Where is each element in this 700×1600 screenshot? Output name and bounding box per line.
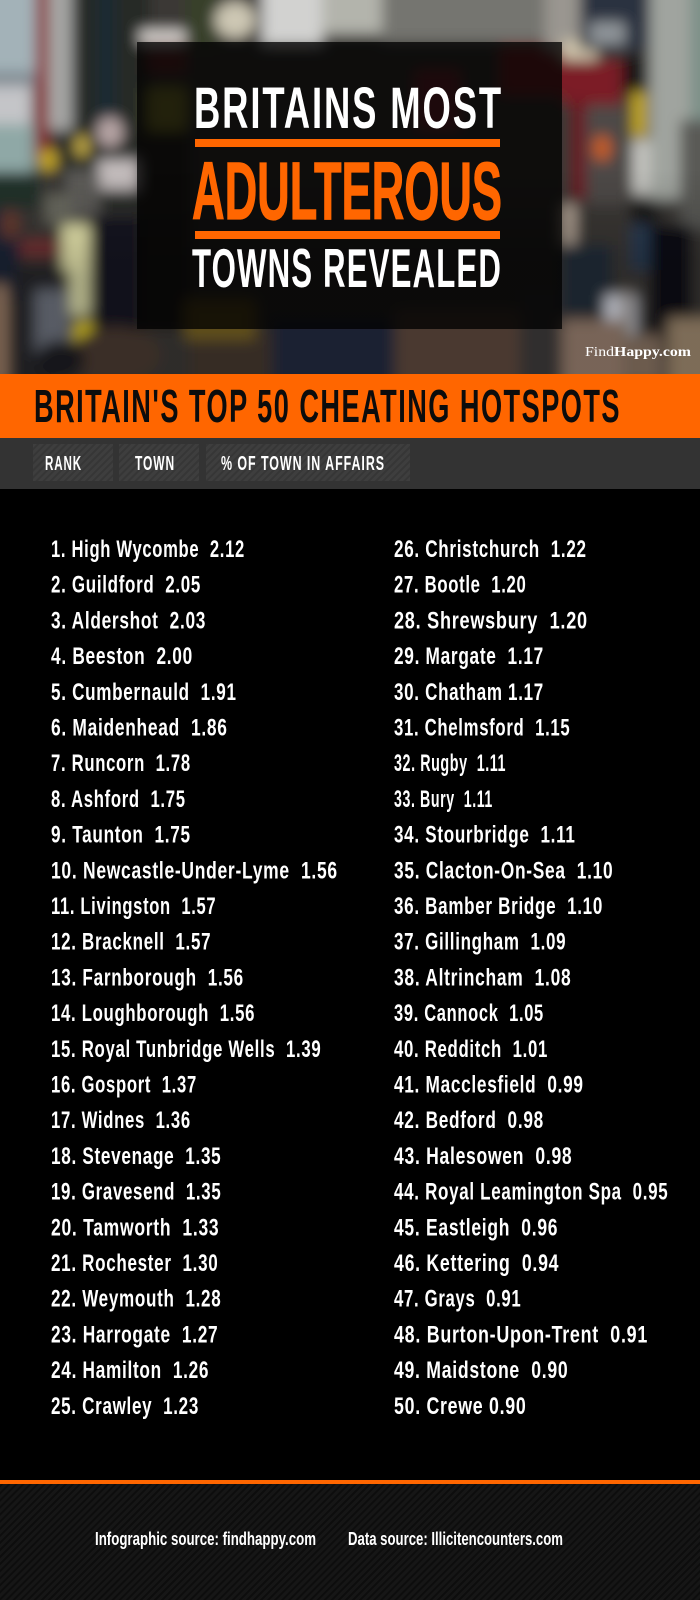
list column: ranks 1 to 25: 7. Runcorn 1.78 [51,750,191,777]
list column: ranks 26 to 50: 50. Crewe 0.90 [394,1393,526,1420]
list column: ranks 1 to 25: 1. High Wycombe 2.12 [51,536,245,563]
list column: ranks 26 to 50: 38. Altrincham 1.08 [394,964,571,991]
table header band [0,438,700,489]
list column: ranks 1 to 25: 2. Guildford 2.05 [51,572,201,599]
list column: ranks 1 to 25: 19. Gravesend 1.35 [51,1179,221,1206]
list column: ranks 26 to 50: 42. Bedford 0.98 [394,1107,544,1134]
list column: ranks 26 to 50: 32. Rugby 1.11 [394,750,506,777]
list column: ranks 26 to 50: 47. Grays 0.91 [394,1286,521,1313]
list column: ranks 26 to 50: 27. Bootle 1.20 [394,572,526,599]
orange rule below [195,231,500,239]
header cell: town: TOWN [135,453,175,475]
header cell: percentage [206,444,410,481]
list column: ranks 26 to 50 [394,536,668,1420]
list column: ranks 1 to 25: 6. Maidenhead 1.86 [51,714,228,742]
list column: ranks 1 to 25: 18. Stevenage 1.35 [51,1143,221,1170]
list column: ranks 1 to 25 [51,536,338,1420]
header cell: percentage: % OF TOWN IN AFFAIRS [221,453,385,475]
header cell: rank [33,444,113,481]
list column: ranks 1 to 25: 9. Taunton 1.75 [51,822,191,849]
list column: ranks 1 to 25: 22. Weymouth 1.28 [51,1286,221,1313]
list column: ranks 26 to 50: 49. Maidstone 0.90 [394,1357,568,1384]
list column: ranks 26 to 50: 26. Christchurch 1.22 [394,536,587,563]
list column: ranks 26 to 50: 30. Chatham 1.17 [394,679,544,706]
list column: ranks 26 to 50: 43. Halesowen 0.98 [394,1143,572,1170]
list column: ranks 26 to 50: 46. Kettering 0.94 [394,1250,559,1277]
list column: ranks 26 to 50: 28. Shrewsbury 1.20 [394,607,588,634]
list column: ranks 1 to 25: 14. Loughborough 1.56 [51,1000,255,1027]
list column: ranks 26 to 50: 37. Gillingham 1.09 [394,929,566,956]
list column: ranks 1 to 25: 10. Newcastle-Under-Lyme 1.56 [51,857,338,884]
heading band: orange [0,374,700,438]
list column: ranks 26 to 50: 45. Eastleigh 0.96 [394,1214,558,1241]
list column: ranks 26 to 50: 41. Macclesfield 0.99 [394,1072,584,1098]
list column: ranks 1 to 25: 3. Aldershot 2.03 [51,607,206,634]
footer: data source: Data source: Illicitencounters.com [348,1529,563,1549]
footer: infographic source: Infographic source: findhappy.com [95,1529,316,1549]
list column: ranks 1 to 25: 17. Widnes 1.36 [51,1107,191,1134]
header cell: town [119,444,199,481]
list column: ranks 1 to 25: 4. Beeston 2.00 [51,643,193,670]
list column: ranks 1 to 25: 23. Harrogate 1.27 [51,1321,218,1348]
list column: ranks 26 to 50: 31. Chelmsford 1.15 [394,714,570,742]
brand logo: FindHappy.com: FindHappy.com [585,345,691,360]
ranking list panel [51,536,668,1420]
orange rule above [195,139,500,147]
list column: ranks 1 to 25: 24. Hamilton 1.26 [51,1357,209,1384]
list column: ranks 1 to 25: 5. Cumbernauld 1.91 [51,679,237,706]
hero photo: blurred street crowd [0,0,700,400]
title line 1: BRITAINS MOST [194,76,503,141]
list column: ranks 26 to 50: 36. Bamber Bridge 1.10 [394,893,603,920]
list column: ranks 1 to 25: 11. Livingston 1.57 [51,893,216,920]
list column: ranks 1 to 25: 25. Crawley 1.23 [51,1393,199,1420]
list column: ranks 26 to 50: 35. Clacton-On-Sea 1.10 [394,857,613,884]
list column: ranks 1 to 25: 15. Royal Tunbridge Wells 1.39 [51,1036,321,1063]
list column: ranks 26 to 50: 29. Margate 1.17 [394,643,544,670]
list column: ranks 26 to 50: 40. Redditch 1.01 [394,1036,548,1063]
list column: ranks 1 to 25: 8. Ashford 1.75 [51,786,186,813]
list column: ranks 1 to 25: 21. Rochester 1.30 [51,1250,218,1277]
list column: ranks 26 to 50: 39. Cannock 1.05 [394,1000,544,1027]
title: Britains Most Adulterous Towns Revealed [192,76,503,299]
footer panel [0,1480,700,1600]
list column: ranks 1 to 25: 12. Bracknell 1.57 [51,929,211,956]
header cell: rank: RANK [45,453,82,475]
list column: ranks 1 to 25: 16. Gosport 1.37 [51,1072,197,1098]
list column: ranks 26 to 50: 34. Stourbridge 1.11 [394,822,576,849]
list column: ranks 26 to 50: 33. Bury 1.11 [394,786,493,813]
title panel: translucent dark box [137,42,562,329]
list column: ranks 1 to 25: 13. Farnborough 1.56 [51,964,244,991]
list column: ranks 1 to 25: 20. Tamworth 1.33 [51,1214,219,1241]
